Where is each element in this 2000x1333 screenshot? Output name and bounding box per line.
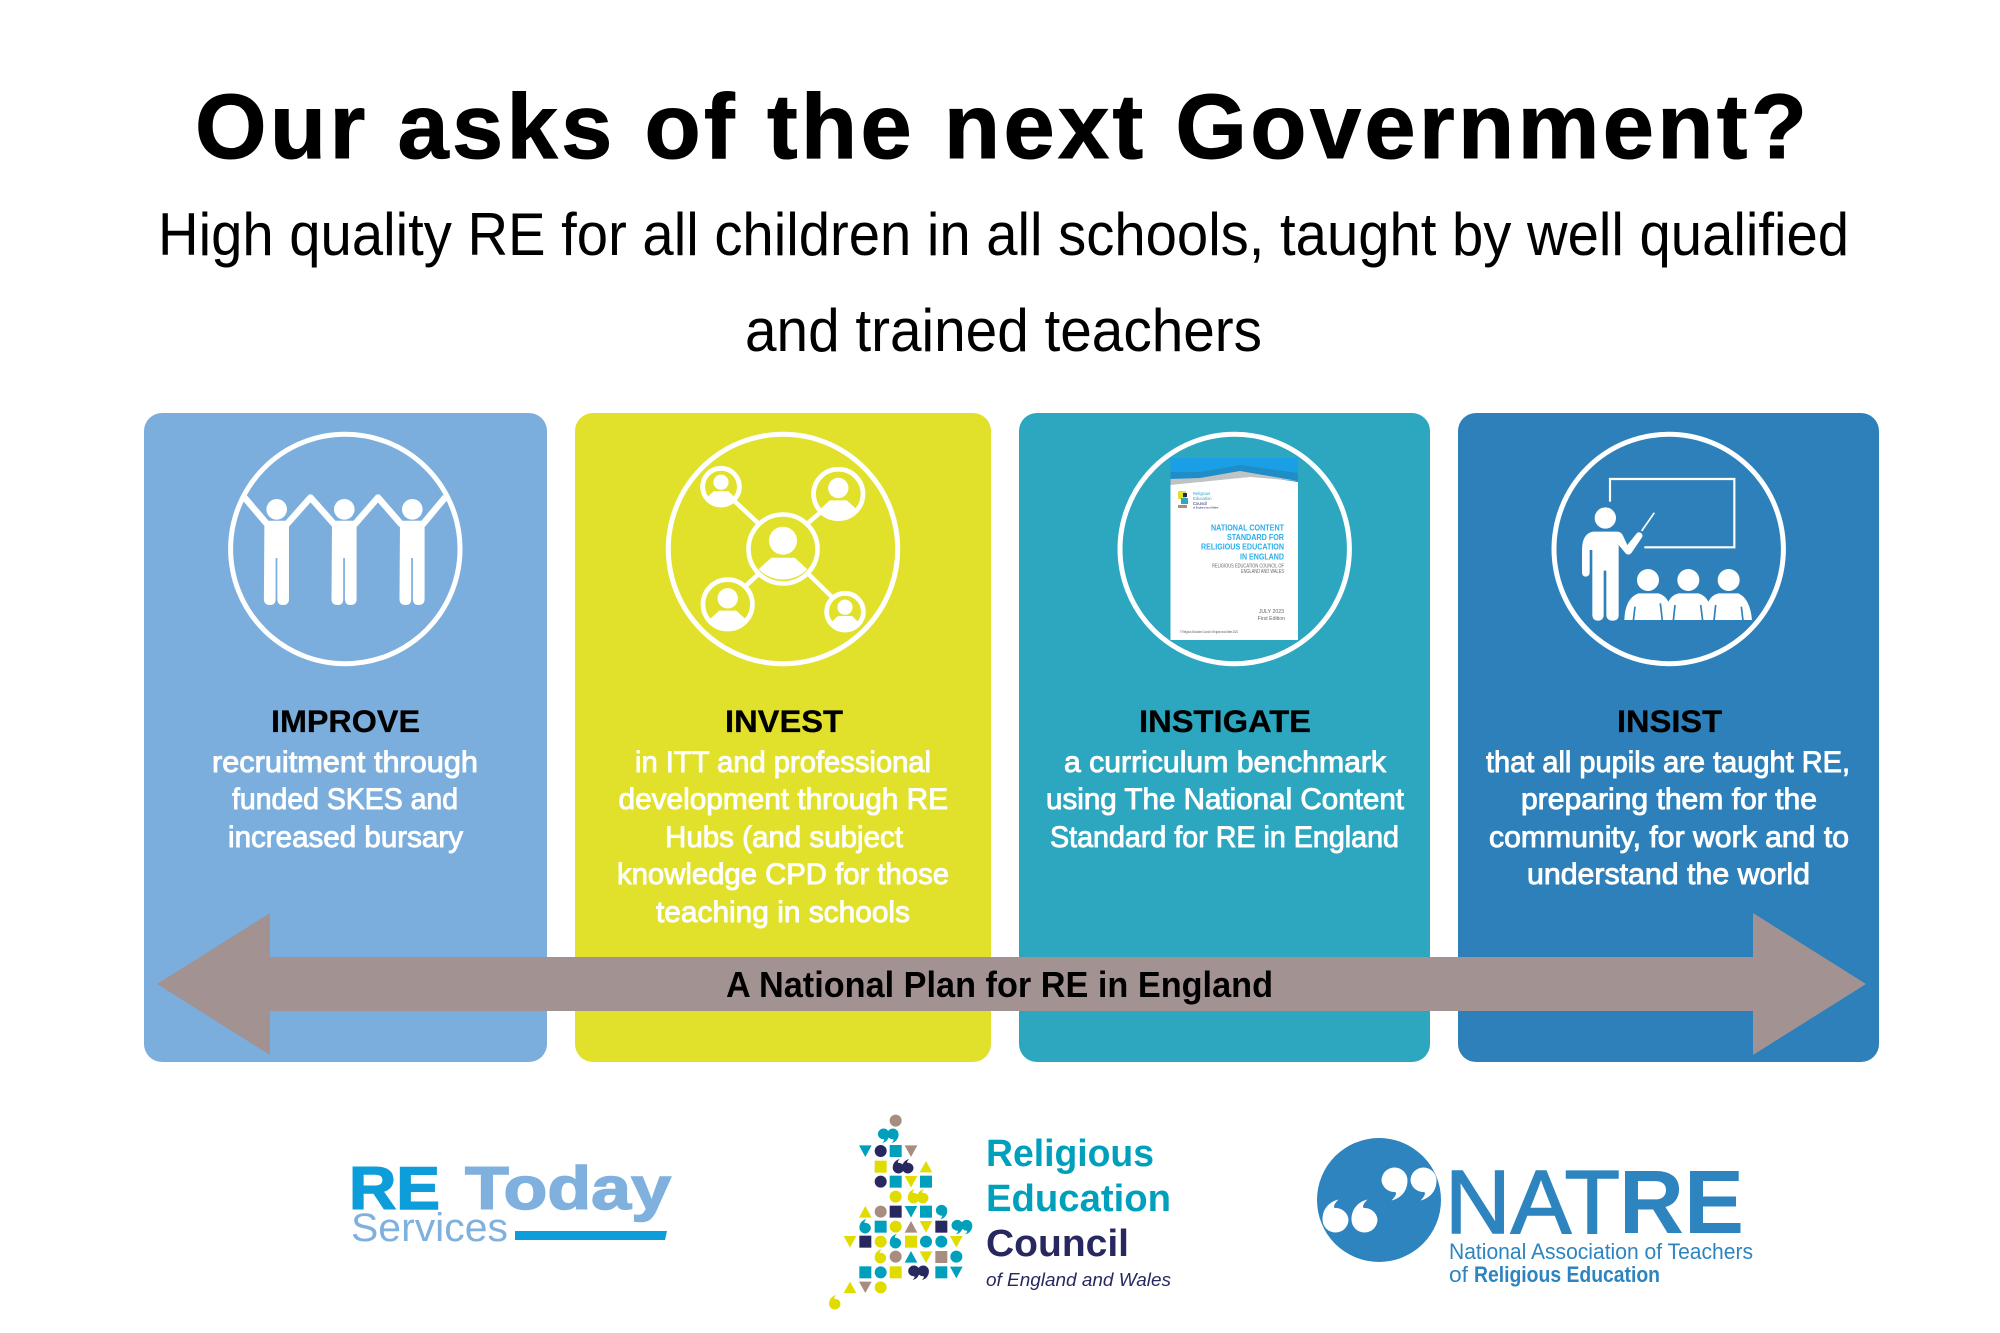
- logo: Religious Education Council: Education: [986, 1178, 1171, 1220]
- text: instigate description: a curriculum benchmark: [1064, 746, 1386, 779]
- logo: Religious Education Council: of England and Wales: [986, 1270, 1171, 1290]
- heading: insist: INSIST: [1617, 703, 1722, 739]
- logo: Religious Education Council: [829, 1115, 1171, 1309]
- logo: NATRE: Religious Education: [1474, 1262, 1660, 1287]
- heading: instigate: INSTIGATE: [1139, 703, 1311, 739]
- text: improve description: increased bursary: [228, 821, 463, 854]
- document publisher and date: [1212, 564, 1285, 622]
- text: insist description: [1486, 746, 1850, 891]
- document title: NATIONAL CONTENT: [1211, 524, 1284, 532]
- text: instigate description: Standard for RE in England: [1050, 821, 1399, 854]
- logo: NATRE: National Association of Teachers: [1449, 1239, 1753, 1264]
- text: invest description: Hubs (and subject: [665, 821, 903, 854]
- document publisher and date: First Edition: [1258, 616, 1285, 622]
- text: invest description: knowledge CPD for those: [617, 858, 949, 891]
- quotation mark roundel: [1317, 1138, 1441, 1262]
- icon: three people with linked arms: [231, 434, 460, 664]
- panel: instigate: [1019, 413, 1430, 1062]
- subtitle: [158, 201, 1849, 364]
- document publisher and date: ENGLAND AND WALES: [1241, 569, 1284, 575]
- logo: NATRE: NAT: [1445, 1153, 1620, 1253]
- document publisher and date: RELIGIOUS EDUCATION COUNCIL OF: [1212, 564, 1284, 570]
- subtitle: High quality RE for all children in all schools, taught by well qualified: [158, 201, 1849, 268]
- icon: connected people network: [668, 434, 898, 664]
- panel: invest: [575, 413, 991, 1062]
- title: Our asks of the next Government?: [195, 76, 1807, 178]
- text: invest description: in ITT and professional: [635, 746, 931, 779]
- logo: Religious Education Council: Council: [986, 1223, 1129, 1265]
- map of shapes: [829, 1115, 972, 1309]
- icon: national content standard document in circle: [1120, 434, 1349, 664]
- logo: RE Today Services: [349, 1155, 672, 1250]
- text: improve description: funded SKES and: [232, 783, 458, 816]
- mini council logo on document: Council: [1193, 501, 1207, 506]
- document footer: © Religious Education Council of England and Wales 2023: [1180, 630, 1238, 634]
- logo: RE Today Services: Services: [351, 1206, 508, 1250]
- text: invest description: teaching in schools: [656, 896, 910, 929]
- document publisher and date: JULY 2023: [1259, 609, 1284, 615]
- panel: improve: [144, 413, 547, 1062]
- logo: Religious Education Council: Religious: [986, 1133, 1154, 1175]
- mini council logo on document: [1178, 491, 1219, 510]
- logo: NATRE: [1317, 1138, 1753, 1287]
- text: insist description: preparing them for the: [1521, 783, 1817, 816]
- document title: [1201, 524, 1284, 562]
- text: insist description: understand the world: [1527, 858, 1810, 891]
- text: instigate description: [1046, 746, 1404, 854]
- text: instigate description: using The National Content: [1046, 783, 1404, 816]
- text: improve description: recruitment through: [212, 746, 478, 779]
- logo: NATRE: RE: [1619, 1153, 1744, 1253]
- subtitle: and trained teachers: [745, 297, 1262, 364]
- mini council logo on document: Religious: [1193, 491, 1210, 496]
- arrow: national plan double-headed arrow: [157, 913, 1866, 1055]
- logo: NATRE: of: [1449, 1262, 1469, 1287]
- document title: RELIGIOUS EDUCATION: [1201, 542, 1284, 552]
- text: insist description: that all pupils are taught RE,: [1486, 746, 1850, 779]
- text: invest description: [617, 746, 949, 929]
- text: improve description: [212, 746, 478, 854]
- document title: IN ENGLAND: [1240, 552, 1284, 562]
- logo: RE Today Services: RE: [349, 1155, 440, 1222]
- heading: improve: IMPROVE: [271, 703, 420, 739]
- mini council logo on document: of England and Wales: [1193, 506, 1219, 510]
- text: invest description: development through RE: [618, 783, 948, 816]
- logo: RE Today Services: Today: [465, 1155, 672, 1222]
- text: insist description: community, for work and to: [1489, 821, 1849, 854]
- mini council logo on document: Education: [1193, 496, 1212, 501]
- panel: insist: [1458, 413, 1879, 1062]
- heading: invest: INVEST: [725, 703, 843, 739]
- icon: teacher at board with pupils: [1554, 434, 1783, 664]
- arrow label: A National Plan for RE in England: [726, 964, 1273, 1005]
- document title: STANDARD FOR: [1227, 533, 1284, 542]
